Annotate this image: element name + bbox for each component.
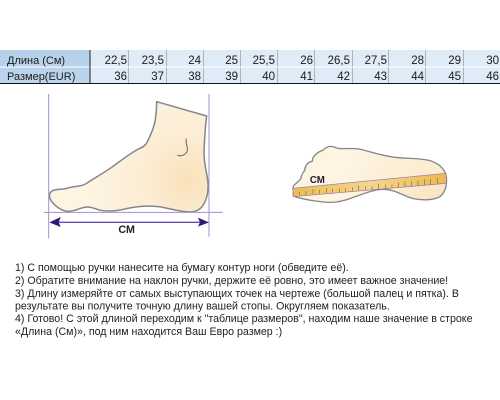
row: EUR size: Размер(EUR) (7, 71, 75, 83)
row: EUR size: 44 (411, 71, 425, 83)
measurement guide lines (44, 94, 223, 238)
foot side view diagram (44, 94, 223, 238)
label: CM: CM (310, 175, 325, 186)
size table (0, 50, 500, 84)
instructions text: «Длина (См)», под ним находится Ваш Евро размер :) (15, 326, 282, 338)
row: EUR size: 39 (225, 71, 238, 83)
row: length: 25,5 (253, 55, 275, 67)
row: length (7, 55, 499, 67)
instructions text: 1) С помощью ручки нанесите на бумагу контур ноги (обведите её). (15, 262, 349, 274)
row: length: 23,5 (142, 55, 164, 67)
instructions text: 2) Обратите внимание на наклон ручки, держите её ровно, это имеет важное значение! (15, 275, 448, 287)
row: EUR size: 45 (448, 71, 461, 83)
row: length: 28 (411, 55, 424, 67)
row: EUR size: 42 (337, 71, 350, 83)
foot sole diagram (293, 146, 447, 202)
instructions text: результате вы получите точную длину вашей стопы. Округляем показатель. (15, 300, 390, 312)
instructions text: 4) Готово! С этой длиной переходим к "таблице размеров", находим наше значение в строке (15, 313, 473, 325)
measurement arrow (49, 217, 209, 227)
row: length: 22,5 (105, 55, 127, 67)
row: length: 25 (225, 55, 238, 67)
sole outline (293, 146, 447, 202)
ankle mark (178, 139, 187, 156)
row: EUR size: 41 (300, 71, 313, 83)
row: length: 27,5 (365, 55, 387, 67)
row: EUR size: 37 (151, 71, 164, 83)
instructions text (15, 262, 473, 338)
row: length: 26 (300, 55, 313, 67)
row: EUR size: 38 (188, 71, 201, 83)
row: EUR size (7, 71, 499, 83)
row: length: 26,5 (328, 55, 350, 67)
ruler (293, 173, 447, 197)
row: length: 30 (486, 55, 499, 67)
row: EUR size: 46 (486, 71, 499, 83)
row: EUR size: 43 (374, 71, 387, 83)
row: EUR size: 40 (262, 71, 275, 83)
row: EUR size: 36 (114, 71, 127, 83)
instructions text: 3) Длину измеряйте от самых выступающих точек на чертеже (большой палец и пятка). В (15, 288, 459, 300)
foot outline (49, 102, 208, 212)
row: length: 29 (448, 55, 461, 67)
label: CM: CM (118, 224, 135, 236)
row: length: 24 (188, 55, 202, 67)
row: length: Длина (См) (7, 55, 65, 67)
